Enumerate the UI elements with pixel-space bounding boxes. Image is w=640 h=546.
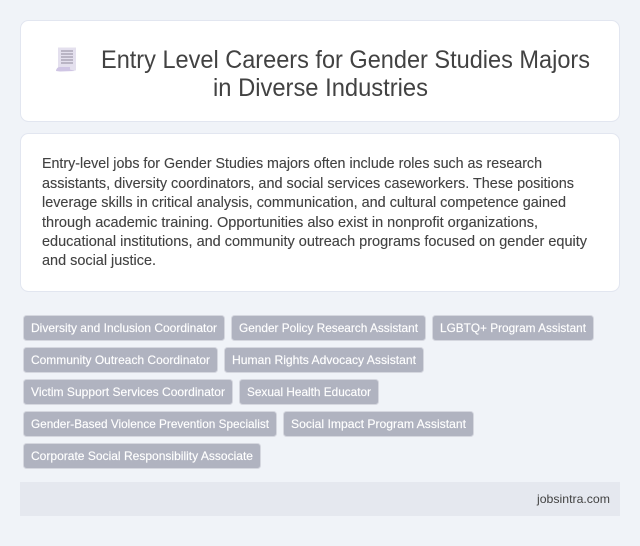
tag: Corporate Social Responsibility Associate: [31, 449, 253, 463]
tag: [232, 316, 426, 340]
tag: [432, 316, 594, 340]
panel: career tags: [24, 316, 594, 468]
footer: jobsintra.com: [536, 492, 610, 506]
description text: through academic training. Opportunities also exist in nonprofit organizations,: [42, 215, 538, 231]
description text: [42, 156, 588, 269]
title: Entry Level Careers for Gender Studies Majors: [101, 46, 590, 74]
panel: description: [20, 134, 620, 292]
tag: [284, 412, 474, 436]
tag: [240, 380, 378, 404]
description text: Entry-level jobs for Gender Studies majors often include roles such as research: [42, 156, 542, 172]
tag: [24, 316, 224, 340]
panel: header: [20, 20, 620, 122]
tag: Sexual Health Educator: [247, 385, 371, 399]
tag: Diversity and Inclusion Coordinator: [31, 321, 217, 335]
tag: [224, 348, 424, 372]
tag: [24, 444, 260, 468]
tag: [24, 380, 232, 404]
tag: [24, 348, 218, 372]
tag: Human Rights Advocacy Assistant: [232, 353, 417, 367]
footer: [20, 482, 620, 516]
description text: leverage skills in critical analysis, communication, and cultural competence gained: [42, 195, 566, 211]
description text: and social justice.: [42, 253, 156, 269]
tag: Gender Policy Research Assistant: [239, 321, 419, 335]
description text: assistants, diversity coordinators, and social services caseworkers. These positions: [42, 176, 574, 192]
tag: Victim Support Services Coordinator: [31, 385, 225, 399]
tag: Social Impact Program Assistant: [291, 417, 467, 431]
tag: [24, 412, 276, 436]
tag: Gender-Based Violence Prevention Specialist: [31, 417, 270, 431]
tag: LGBTQ+ Program Assistant: [440, 321, 587, 335]
title: [101, 46, 590, 102]
title: in Diverse Industries: [213, 74, 428, 102]
icon: document scroll: [56, 48, 76, 72]
tag: Community Outreach Coordinator: [31, 353, 210, 367]
description text: educational institutions, and community outreach programs focused on gender equity: [42, 234, 588, 250]
